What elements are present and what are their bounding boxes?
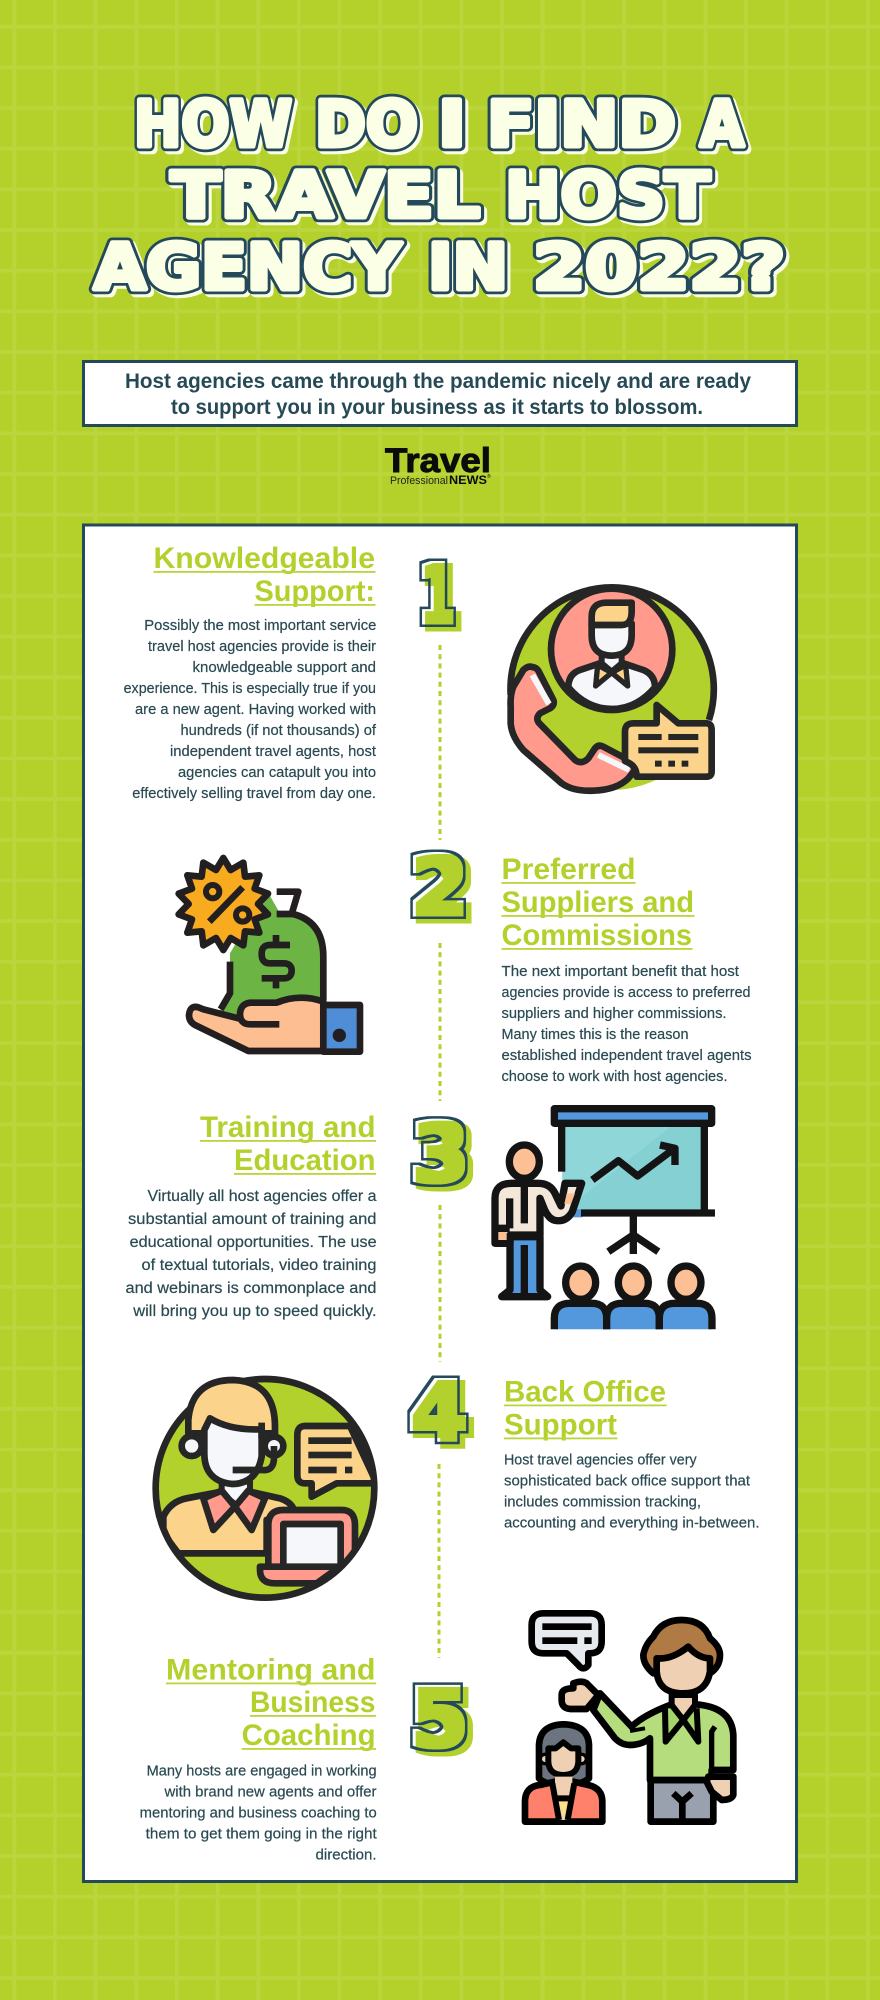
section 2 body text: agencies provide is access to preferred [502,985,750,1001]
section 5 body text: with brand new agents and offer [163,1784,377,1800]
title: DO [315,88,418,161]
section 1 body text: travel host agencies provide is their [148,639,376,655]
section 5 body text: Many hosts are engaged in working [147,1764,377,1780]
title: I [438,88,466,161]
section 1 body text: hundreds (if not thousands) of [180,723,377,739]
title: HOST [505,159,710,232]
section 3 body text [126,1188,377,1320]
section 3 heading: Education [234,1144,376,1177]
main white panel [84,525,796,1882]
title: AGENCY [94,231,402,304]
section 2 heading [502,853,694,952]
section 3 body text: of textual tutorials, video training [142,1257,376,1274]
section 5 heading: Coaching [242,1719,376,1752]
section 1 body text [124,618,377,802]
title: IN [431,234,511,307]
title: AGENCY [94,231,402,304]
section 1 body text: experience. This is especially true if you [124,681,376,697]
section 4 body text [504,1452,760,1532]
section 5 heading [166,1654,376,1752]
section 1 heading: Support: [254,575,375,608]
section 1 body text: independent travel agents, host [170,744,376,760]
title: I [441,91,469,164]
section 2 body text: choose to work with host agencies. [502,1069,728,1085]
title: FIND [490,91,679,164]
number 2: 2 [408,840,468,933]
section 5 body text: mentoring and business coaching to [140,1806,377,1822]
title: A [703,91,747,164]
section 2 heading: Suppliers and [502,886,694,919]
intro callout box: to support you in your business as it starts to blossom. [171,396,703,419]
section 3 heading: Training and [200,1111,376,1144]
section 4 heading: Back Office [504,1376,666,1408]
title: TRAVEL [174,162,483,235]
title: 2022? [533,231,785,304]
title: DO [315,88,418,161]
section 2 body text: Many times this is the reason [502,1027,688,1043]
number 1: 1 [424,552,460,646]
title: HOW [134,88,292,161]
title: IN [428,231,508,304]
number 2: 2 [414,844,474,938]
section 2 body text [502,964,752,1085]
number 3: 3 [410,1107,470,1200]
title: HOW [134,88,292,161]
section 5 body text: them to get them going in the right [146,1826,377,1842]
number 5: 5 [414,1676,474,1770]
title: TRAVEL [171,159,480,232]
section 5 heading: Business [250,1686,376,1719]
icon: presenter with chart and audience [495,1109,715,1329]
number 4: 4 [408,1365,468,1458]
number 4: 4 [414,1370,473,1462]
title: HOST [508,162,713,235]
section 2 body text: The next important benefit that host [502,964,739,980]
icon: customer service agent with headset [156,1379,377,1598]
section 4 body text: accounting and everything in-between. [504,1516,760,1532]
title: DO [318,91,421,164]
icon: money bag in hand with percent badge [179,858,360,1052]
section 4 body text: Host travel agencies offer very [504,1452,697,1468]
intro callout box: Host agencies came through the pandemic nicely and are ready [125,370,751,393]
section 5 body text: direction. [316,1848,376,1864]
section 4 heading [504,1376,666,1442]
logo: Travel Professional News: Professional [390,475,448,487]
section 3 body text: will bring you up to speed quickly. [132,1303,377,1320]
icon: mentor pointing with student and speech bubble [525,1613,733,1823]
title: I [438,88,466,161]
title: A [700,88,744,161]
section 4 body text: includes commission tracking, [504,1494,701,1510]
section 1 heading [154,542,376,608]
title: 2022? [536,234,788,307]
section 2 heading: Preferred [502,853,636,886]
section 2 body text: suppliers and higher commissions. [502,1006,726,1022]
section 3 body text: and webinars is commonplace and [126,1280,376,1297]
section 3 body text: Virtually all host agencies offer a [148,1188,377,1205]
section 5 body text [140,1764,377,1864]
section 1 body text: are a new agent. Having worked with [135,702,376,718]
number 3: 3 [415,1112,475,1204]
section 3 body text: educational opportunities. The use [130,1234,377,1251]
icon: phone support agent [510,587,714,791]
section 1 body text: knowledgeable support and [192,660,376,676]
title: 2022? [533,231,785,304]
title [94,88,788,307]
title: HOW [137,91,295,164]
title: TRAVEL [171,159,480,232]
title: HOST [505,159,710,232]
title: IN [428,231,508,304]
number 1: 1 [418,548,454,641]
section 5 heading: Mentoring and [166,1654,376,1686]
section 2 body text: established independent travel agents [502,1048,752,1064]
intro callout box [84,362,796,426]
title: AGENCY [97,234,405,307]
section 1 body text: agencies can catapult you into [178,765,376,781]
title: FIND [487,88,676,161]
section 4 heading: Support [504,1408,617,1442]
logo: Travel Professional News: ® [487,473,491,480]
logo: Travel Professional News: NEWS [449,475,487,487]
section 4 body text: sophisticated back office support that [504,1474,750,1490]
dotted timeline connectors [439,645,440,1658]
section 2 heading: Commissions [502,919,692,952]
section 1 heading: Knowledgeable [154,542,375,575]
section 3 heading [200,1111,376,1177]
title: FIND [487,88,676,161]
section 1 body text: effectively selling travel from day one. [132,786,376,802]
logo: Travel Professional News: Travel [385,442,491,480]
number 5: 5 [408,1672,468,1765]
section 1 body text: Possibly the most important service [144,618,376,634]
title: A [700,88,744,161]
section 3 body text: substantial amount of training and [128,1211,376,1228]
